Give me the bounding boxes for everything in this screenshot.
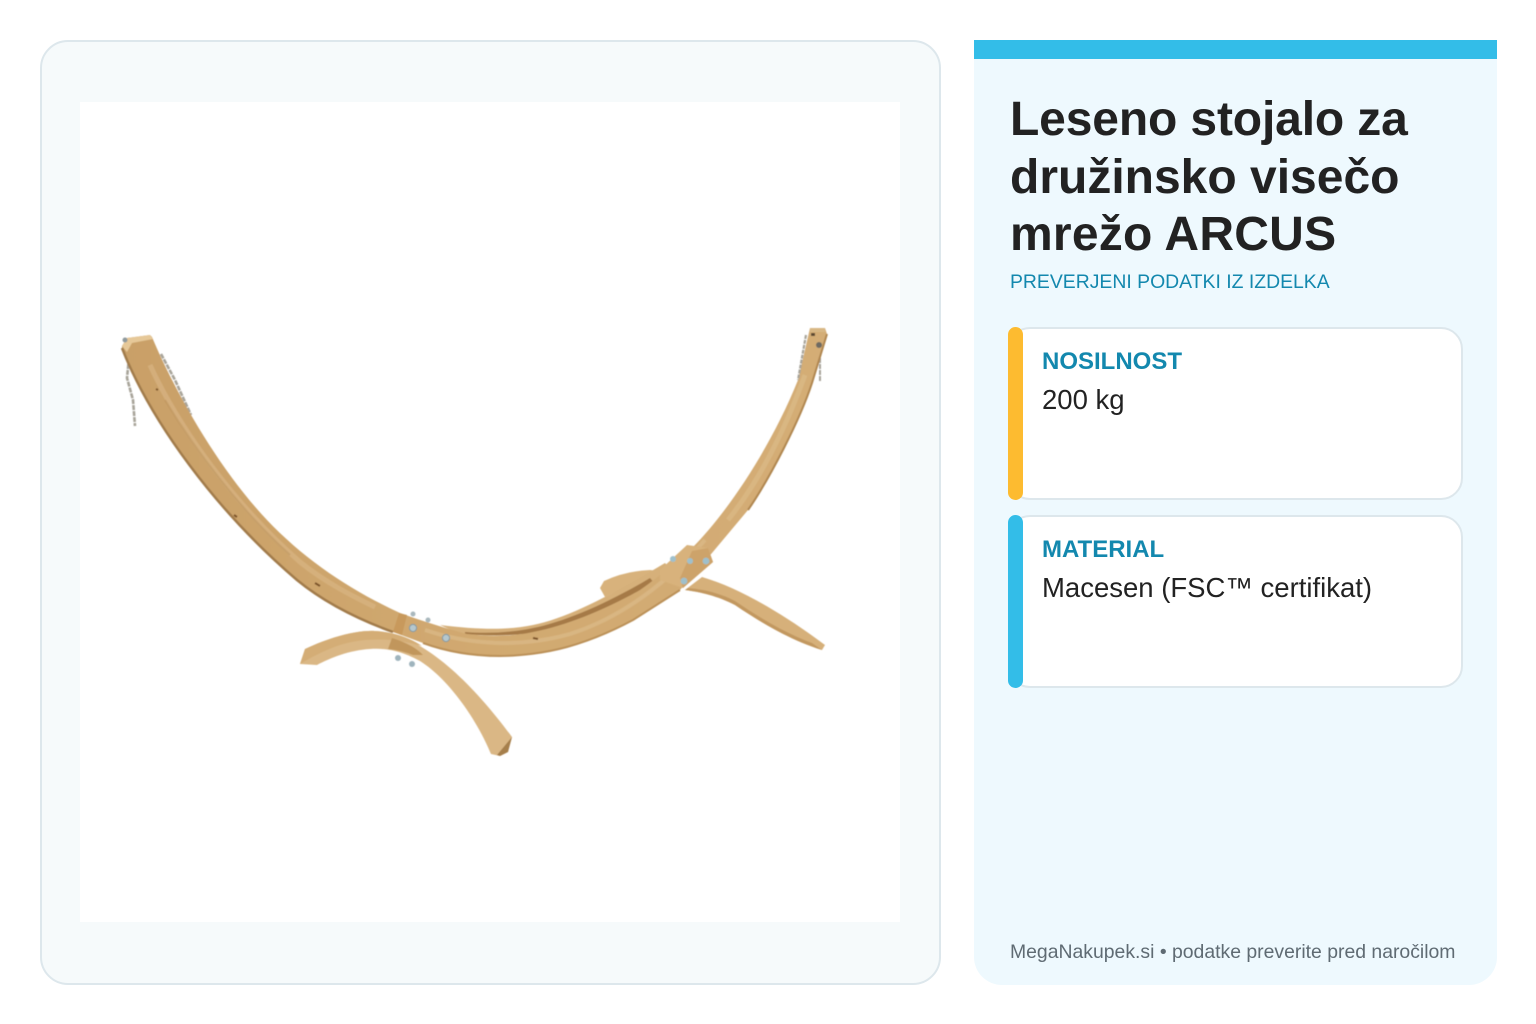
- left foot: [300, 631, 512, 756]
- product image: wooden hammock stand: [80, 102, 900, 922]
- panel: product image: [40, 40, 941, 985]
- back rail of main arc: [440, 563, 680, 635]
- panel: product information: [974, 40, 1497, 985]
- left joint with bolts: [393, 612, 450, 642]
- card stripe: [1008, 515, 1023, 688]
- footer note: MegaNakupek.si • podatke preverite pred naročilom: [1010, 941, 1455, 963]
- subtitle: PREVERJENI PODATKI IZ IZDELKA: [1010, 271, 1330, 293]
- card value: Macesen (FSC™ certifikat): [1042, 572, 1372, 603]
- card label: MATERIAL: [1042, 536, 1164, 563]
- shading on beam: [122, 334, 827, 656]
- main curved beam: [122, 328, 827, 656]
- title: [1010, 93, 1408, 261]
- accent bar: [974, 40, 1497, 59]
- title: Leseno stojalo za: [1010, 93, 1408, 146]
- card label: NOSILNOST: [1042, 348, 1182, 375]
- title: mrežo ARCUS: [1010, 208, 1336, 261]
- card value: 200 kg: [1042, 384, 1125, 415]
- right joint with bolts: [660, 545, 713, 588]
- chains: [127, 354, 820, 426]
- right foot: [600, 570, 825, 650]
- title: družinsko visečo: [1010, 150, 1399, 204]
- card: nosilnost: [1008, 327, 1463, 500]
- beam end caps and knots: [122, 328, 825, 639]
- card: material: [1008, 515, 1463, 688]
- card stripe: [1008, 327, 1023, 500]
